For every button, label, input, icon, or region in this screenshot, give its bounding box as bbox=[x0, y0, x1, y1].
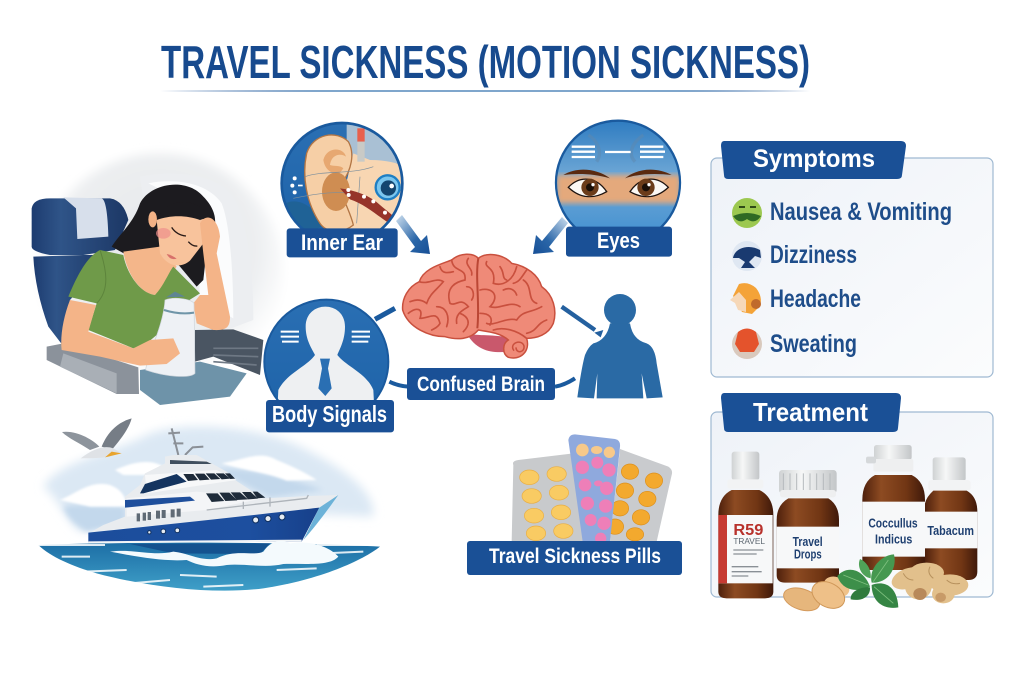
bottle: Travel Drops bbox=[777, 470, 839, 583]
symptom: nausea and vomiting bbox=[732, 198, 952, 228]
arrow: eyes to brain bbox=[533, 217, 568, 254]
symptom: sweating bbox=[732, 328, 857, 359]
symptom: headache: Headache bbox=[770, 285, 861, 313]
illustration: travel sickness pills bbox=[467, 434, 682, 575]
bottle: R59 Travel bbox=[718, 452, 773, 598]
symptom: dizziness: Dizziness bbox=[770, 241, 857, 269]
illustration: woman feeling sick on airplane seat bbox=[32, 153, 283, 405]
heading: Treatment bbox=[721, 393, 901, 432]
panel: treatment bbox=[711, 393, 993, 615]
symptom: headache bbox=[730, 283, 861, 314]
heading: Symptoms bbox=[721, 141, 906, 179]
arrow: inner ear to brain bbox=[396, 215, 430, 254]
bottle: Coccullus Indicus: Indicus bbox=[875, 531, 912, 546]
label: Travel Sickness Pills bbox=[467, 541, 682, 575]
ginger root bbox=[889, 563, 968, 603]
bottle: R59 Travel: TRAVEL bbox=[733, 536, 765, 546]
bottle: Travel Drops: Drops bbox=[794, 546, 822, 561]
circle: inner ear bbox=[280, 120, 407, 257]
bottle: Coccullus Indicus bbox=[862, 445, 925, 570]
heading: Symptoms: Symptoms bbox=[753, 145, 875, 173]
symptom: dizziness bbox=[732, 241, 857, 271]
icon: person silhouette bbox=[555, 294, 663, 398]
panel: motion sickness diagram bbox=[264, 120, 680, 432]
bottle: Tabacum: Tabacum bbox=[927, 523, 974, 538]
panel: symptoms bbox=[711, 141, 993, 377]
bottle: R59 Travel: R59 bbox=[733, 522, 763, 539]
label: Travel Sickness Pills: Travel Sickness Pills bbox=[489, 545, 661, 568]
label: Confused Brain: Confused Brain bbox=[417, 373, 545, 396]
ginger slices bbox=[781, 573, 853, 615]
label: Eyes: Eyes bbox=[597, 228, 640, 253]
bottle: Tabacum bbox=[925, 457, 977, 580]
icon: seagull bbox=[62, 418, 132, 458]
circle: body signals bbox=[264, 300, 408, 432]
mint leaves bbox=[837, 554, 898, 608]
label: Confused Brain bbox=[407, 368, 555, 400]
label: Inner Ear: Inner Ear bbox=[301, 230, 383, 255]
bottle: Travel Drops: Travel bbox=[793, 534, 823, 549]
label: Body Signals: Body Signals bbox=[272, 401, 387, 427]
heading: Treatment: Treatment bbox=[753, 397, 868, 427]
bottle: Coccullus Indicus: Coccullus bbox=[868, 515, 918, 530]
symptom: nausea and vomiting: Nausea & Vomiting bbox=[770, 198, 952, 226]
symptom: sweating: Sweating bbox=[770, 330, 857, 358]
illustration: boat with seagull on the sea bbox=[38, 418, 380, 591]
brain illustration bbox=[403, 254, 555, 358]
circle: eyes bbox=[556, 121, 680, 257]
